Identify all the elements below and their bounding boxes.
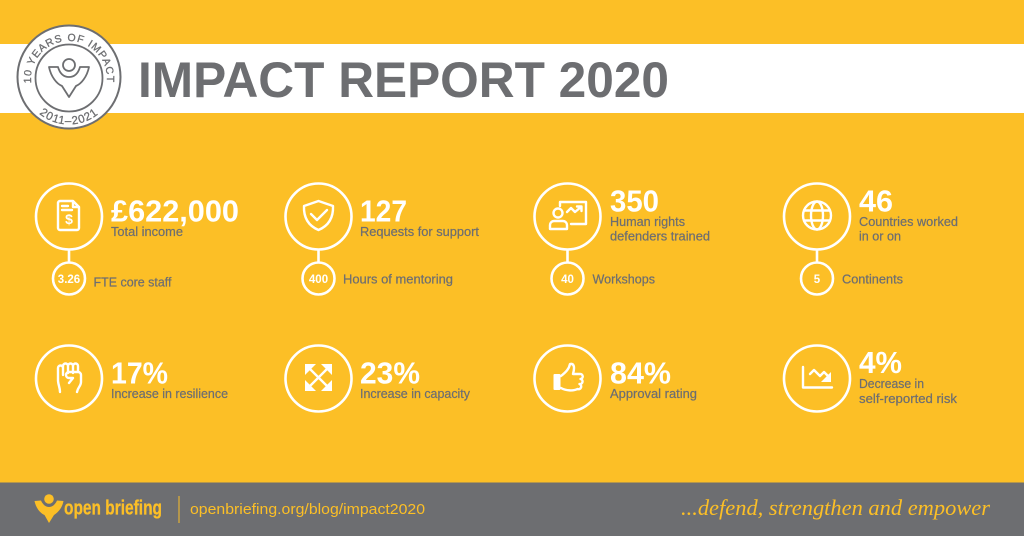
stat: total income <box>36 184 239 294</box>
stat: defenders trained <box>534 184 710 294</box>
stat: total income: $ <box>65 211 73 227</box>
stat: requests for support <box>286 184 479 294</box>
stat: capacity: 23% <box>360 355 420 390</box>
stat: countries: Countries worked <box>859 214 958 229</box>
stat: total income: 3.26 <box>58 274 80 286</box>
stat: total income: FTE core staff <box>94 275 172 290</box>
badge: 10 years of impact: 10 YEARS OF IMPACT <box>24 34 114 83</box>
stat: requests for support: 127 <box>360 194 407 229</box>
stat: requests for support: 400 <box>309 274 328 286</box>
tagline: ...defend, strengthen and empower <box>681 495 990 520</box>
stat: defenders trained: defenders trained <box>610 229 710 244</box>
stat: countries: in or on <box>859 229 901 244</box>
title band <box>0 44 1024 113</box>
url: openbriefing.org/blog/impact2020 <box>190 501 425 518</box>
stat: resilience <box>36 346 228 412</box>
stat: capacity: Increase in capacity <box>360 386 470 401</box>
stat: risk: Decrease in <box>859 376 924 391</box>
stat: approval: Approval rating <box>610 386 697 401</box>
stat: defenders trained: Workshops <box>592 272 655 286</box>
stat: countries: Continents <box>842 272 903 286</box>
stat: countries: 5 <box>814 274 821 286</box>
stat: approval <box>534 346 697 412</box>
icon: open briefing logo <box>34 494 64 523</box>
stat: risk: 4% <box>859 345 902 380</box>
logo wordmark: open briefing <box>64 498 162 520</box>
stat: total income: Total income <box>111 224 183 239</box>
stat: risk <box>784 345 958 412</box>
stat: risk: self-reported risk <box>859 391 958 406</box>
stat: defenders trained: Human rights <box>610 214 685 229</box>
stat: capacity <box>286 346 470 412</box>
footer bar <box>0 482 1024 536</box>
stat: countries: 46 <box>859 184 893 219</box>
stat: defenders trained: 350 <box>610 184 659 219</box>
stat: requests for support: Hours of mentoring <box>343 272 453 286</box>
stat: resilience: 17% <box>111 355 168 390</box>
stat: resilience: Increase in resilience <box>111 386 228 401</box>
stat: total income: £622,000 <box>111 194 239 229</box>
title: IMPACT REPORT 2020 <box>138 52 669 108</box>
stat: defenders trained: 40 <box>561 274 574 286</box>
badge: 10 years of impact <box>16 24 122 130</box>
stat: requests for support: Requests for support <box>360 224 479 239</box>
stat: countries <box>784 184 958 294</box>
stat: approval: 84% <box>610 355 671 390</box>
badge: 10 years of impact: 2011–2021 <box>39 108 98 125</box>
